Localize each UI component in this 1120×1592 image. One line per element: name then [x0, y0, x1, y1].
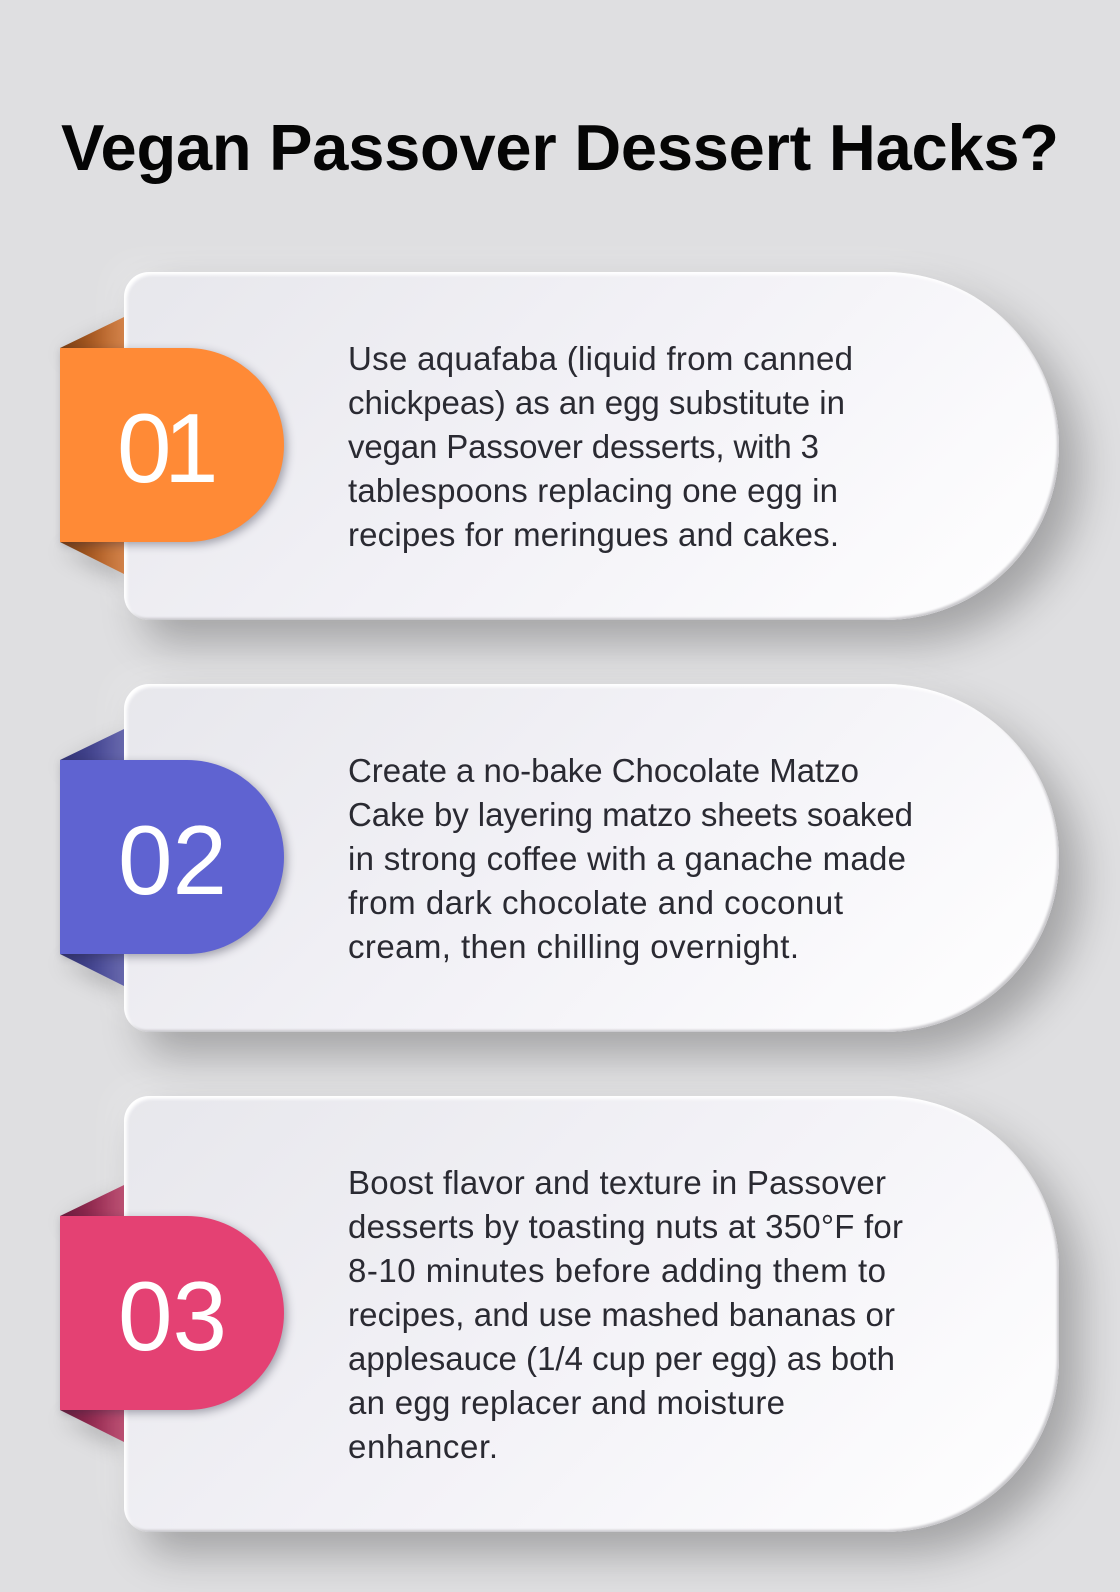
text: step 01 description: chickpeas) as an egg substitute in: [348, 384, 845, 421]
text: step 03 description: enhancer.: [348, 1428, 498, 1465]
badge: number 03: 03: [118, 1261, 227, 1371]
panel: step 02 chocolate matzo cake: [56, 684, 1100, 1076]
icon: pink ribbon folds: [60, 1185, 124, 1452]
icon: blue ribbon folds: [60, 729, 124, 996]
badge: number 01: 01: [117, 393, 219, 503]
card: step 03 background: [124, 1096, 1059, 1532]
text: step 03 description: 8-10 minutes before adding them to: [348, 1252, 886, 1289]
text: step 03 description: applesauce (1/4 cup per egg) as both: [348, 1340, 895, 1377]
badge: number 02: [60, 760, 284, 954]
icon: orange ribbon folds: [60, 317, 124, 584]
text: step 02 description: from dark chocolate and coconut: [348, 884, 843, 921]
text: step 03 description: [348, 1164, 903, 1465]
text: step 01 description: [348, 340, 853, 553]
title: Vegan Passover Dessert Hacks?: [61, 111, 1059, 184]
text: step 02 description: [348, 752, 913, 965]
badge: number 02: 02: [118, 805, 227, 915]
text: step 02 description: in strong coffee with a ganache made: [348, 840, 906, 877]
text: step 02 description: Cake by layering matzo sheets soaked: [348, 796, 913, 833]
text: step 03 description: an egg replacer and moisture: [348, 1384, 785, 1421]
text: step 02 description: cream, then chilling overnight.: [348, 928, 799, 965]
text: step 01 description: vegan Passover desserts, with 3: [348, 428, 819, 465]
text: step 02 description: Create a no-bake Chocolate Matzo: [348, 752, 859, 789]
panel: step 03 toasted nuts and egg replacers: [56, 1096, 1100, 1576]
text: step 03 description: recipes, and use mashed bananas or: [348, 1296, 895, 1333]
badge: number 03: [60, 1216, 284, 1410]
badge: number 01: [60, 348, 284, 542]
text: step 01 description: Use aquafaba (liquid from canned: [348, 340, 853, 377]
text: step 01 description: recipes for meringues and cakes.: [348, 516, 839, 553]
text: step 01 description: tablespoons replacing one egg in: [348, 472, 838, 509]
panel: step 01 aquafaba: [56, 272, 1100, 664]
text: step 03 description: desserts by toasting nuts at 350°F for: [348, 1208, 903, 1245]
text: step 03 description: Boost flavor and texture in Passover: [348, 1164, 886, 1201]
card: step 01 background: [124, 272, 1059, 620]
card: step 02 background: [124, 684, 1059, 1032]
